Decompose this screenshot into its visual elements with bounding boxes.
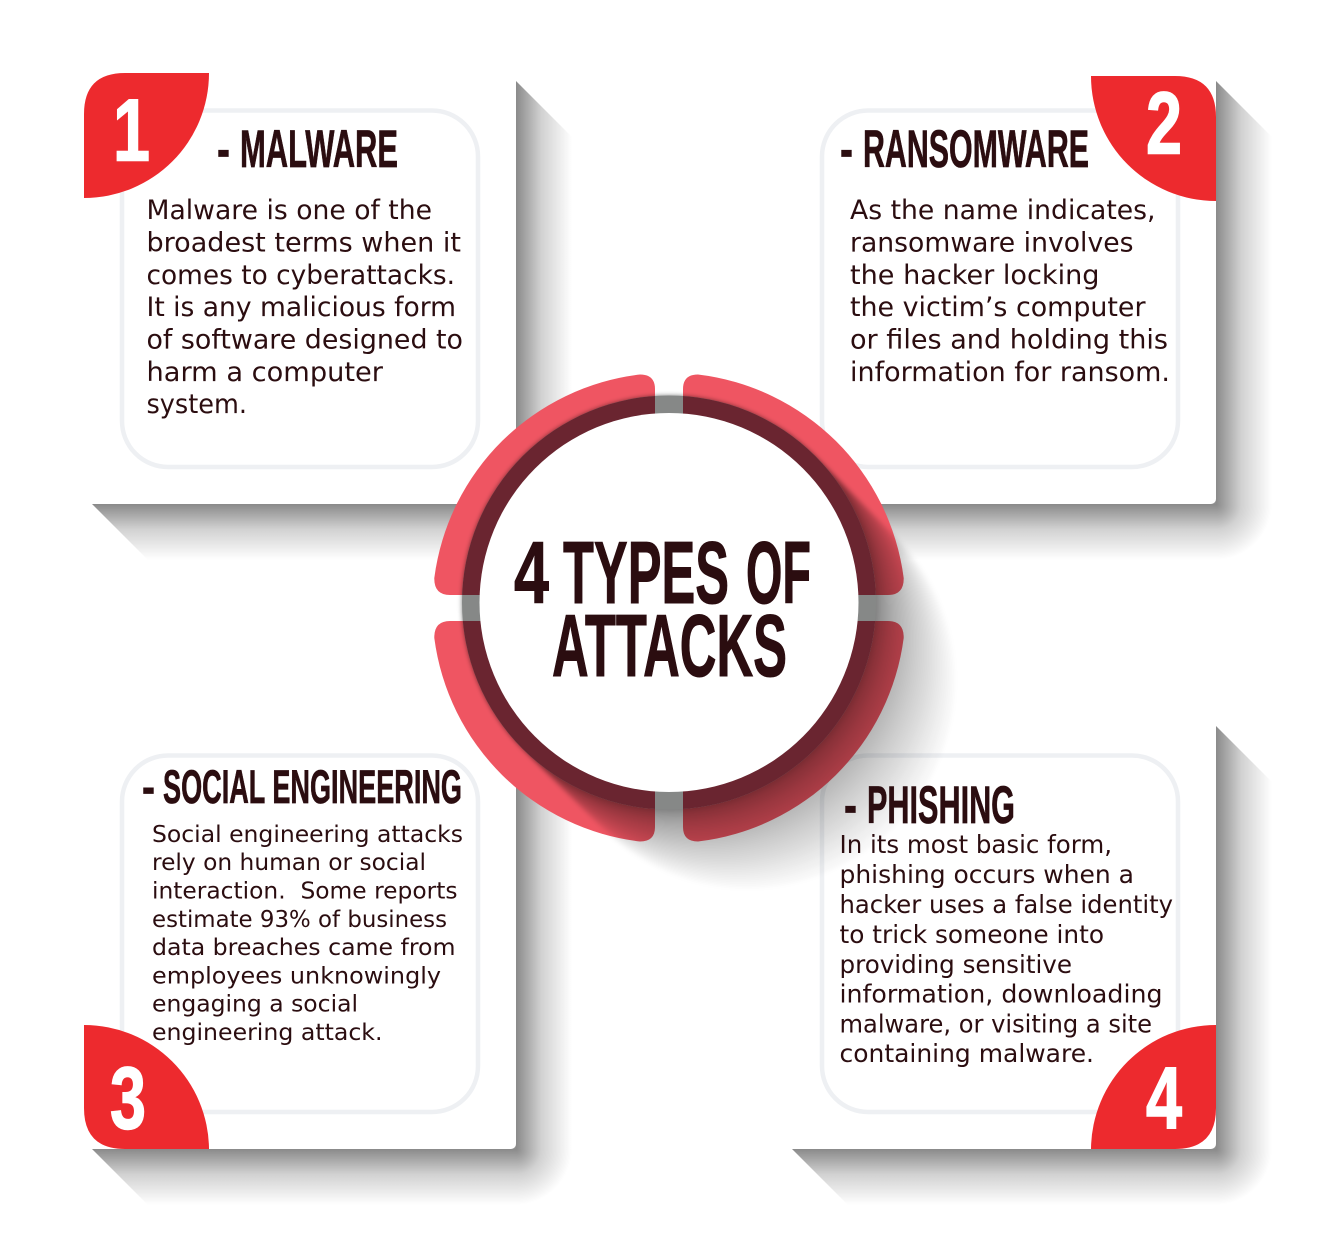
text: phishing description: containing malware.	[840, 1039, 1094, 1068]
title: OF	[746, 523, 811, 622]
badge 2: 2	[1146, 74, 1182, 172]
text: phishing description: information, downloading	[840, 980, 1162, 1008]
panel: social engineering card	[92, 726, 572, 1205]
panel: ransomware card	[792, 81, 1272, 560]
heading: malware: -	[217, 120, 230, 179]
ring segment: bottom left	[434, 621, 655, 842]
text: phishing description: malware, or visiting a site	[840, 1010, 1152, 1038]
badge 4	[1091, 1025, 1216, 1149]
panel: phishing card	[792, 726, 1272, 1205]
text: social engineering description: estimate 93% of business	[152, 906, 447, 933]
heading: social engineering	[142, 760, 462, 813]
text: ransomware description: or files and holding this	[850, 324, 1168, 356]
heading: social engineering: SOCIAL ENGINEERING	[163, 760, 462, 813]
heading: malware	[217, 120, 398, 179]
ring band on segments	[462, 396, 876, 810]
text: ransomware description: information for ransom.	[850, 357, 1170, 388]
panel: malware card	[92, 81, 572, 560]
heading: ransomware	[840, 120, 1089, 179]
heading: phishing	[844, 776, 1015, 835]
text: ransomware description: the hacker locking	[850, 260, 1100, 291]
text: ransomware description	[850, 195, 1170, 388]
text: social engineering description: employees unknowingly	[152, 962, 441, 990]
text: social engineering description: engineering attack.	[152, 1019, 382, 1046]
text: social engineering description: Social engineering attacks	[152, 821, 463, 848]
text: ransomware description: ransomware involves	[850, 228, 1134, 258]
text: phishing description: to trick someone into	[840, 920, 1104, 949]
text: malware description: harm a computer	[146, 357, 383, 388]
badge 1	[84, 73, 209, 198]
text: phishing description: providing sensitive	[840, 950, 1072, 979]
badge 1: 1	[113, 80, 150, 180]
heading: ransomware: -	[840, 120, 853, 179]
heading: ransomware: RANSOMWARE	[863, 120, 1089, 179]
text: social engineering description: data breaches came from	[152, 934, 456, 961]
long diagonal shadow	[669, 602, 747, 680]
heading: phishing: -	[844, 776, 857, 835]
text: malware description	[146, 195, 463, 420]
text: phishing description: hacker uses a false identity	[840, 890, 1173, 919]
title: 4	[514, 523, 549, 622]
text: malware description: broadest terms when it	[146, 228, 461, 258]
text: social engineering description: rely on human or social	[152, 849, 426, 876]
text: phishing description	[840, 830, 1173, 1068]
badge 2	[1091, 74, 1216, 201]
text: malware description: system.	[146, 389, 247, 420]
text: ransomware description: the victim’s computer	[850, 292, 1146, 323]
text: malware description: comes to cyberattacks.	[146, 260, 455, 291]
text: malware description: Malware is one of the	[146, 195, 432, 226]
ring segment: top right	[683, 374, 904, 595]
title: ATTACKS	[552, 596, 787, 695]
badge 3	[84, 1025, 209, 1149]
center disc	[480, 413, 858, 792]
ring segment: top left	[434, 374, 655, 595]
text: malware description: of software designed to	[146, 324, 463, 356]
text: malware description: It is any malicious form	[146, 292, 456, 323]
ring segment: bottom right	[683, 621, 904, 842]
text: phishing description: In its most basic form,	[840, 830, 1112, 859]
heading: social engineering: -	[142, 760, 155, 813]
ring band gaps	[462, 396, 876, 810]
badge 4: 4	[1146, 1048, 1182, 1148]
heading: malware: MALWARE	[240, 120, 398, 179]
heading: phishing: PHISHING	[867, 776, 1015, 835]
badge 3: 3	[110, 1048, 146, 1148]
title	[514, 523, 811, 695]
text: social engineering description: interaction. Some reports	[152, 878, 458, 904]
text: social engineering description	[152, 821, 463, 1046]
text: social engineering description: engaging a social	[152, 990, 358, 1018]
chart: central ring with segments	[434, 374, 904, 842]
text: ransomware description: As the name indicates,	[850, 195, 1156, 226]
title: TYPES	[563, 523, 729, 622]
text: phishing description: phishing occurs when a	[840, 860, 1134, 889]
